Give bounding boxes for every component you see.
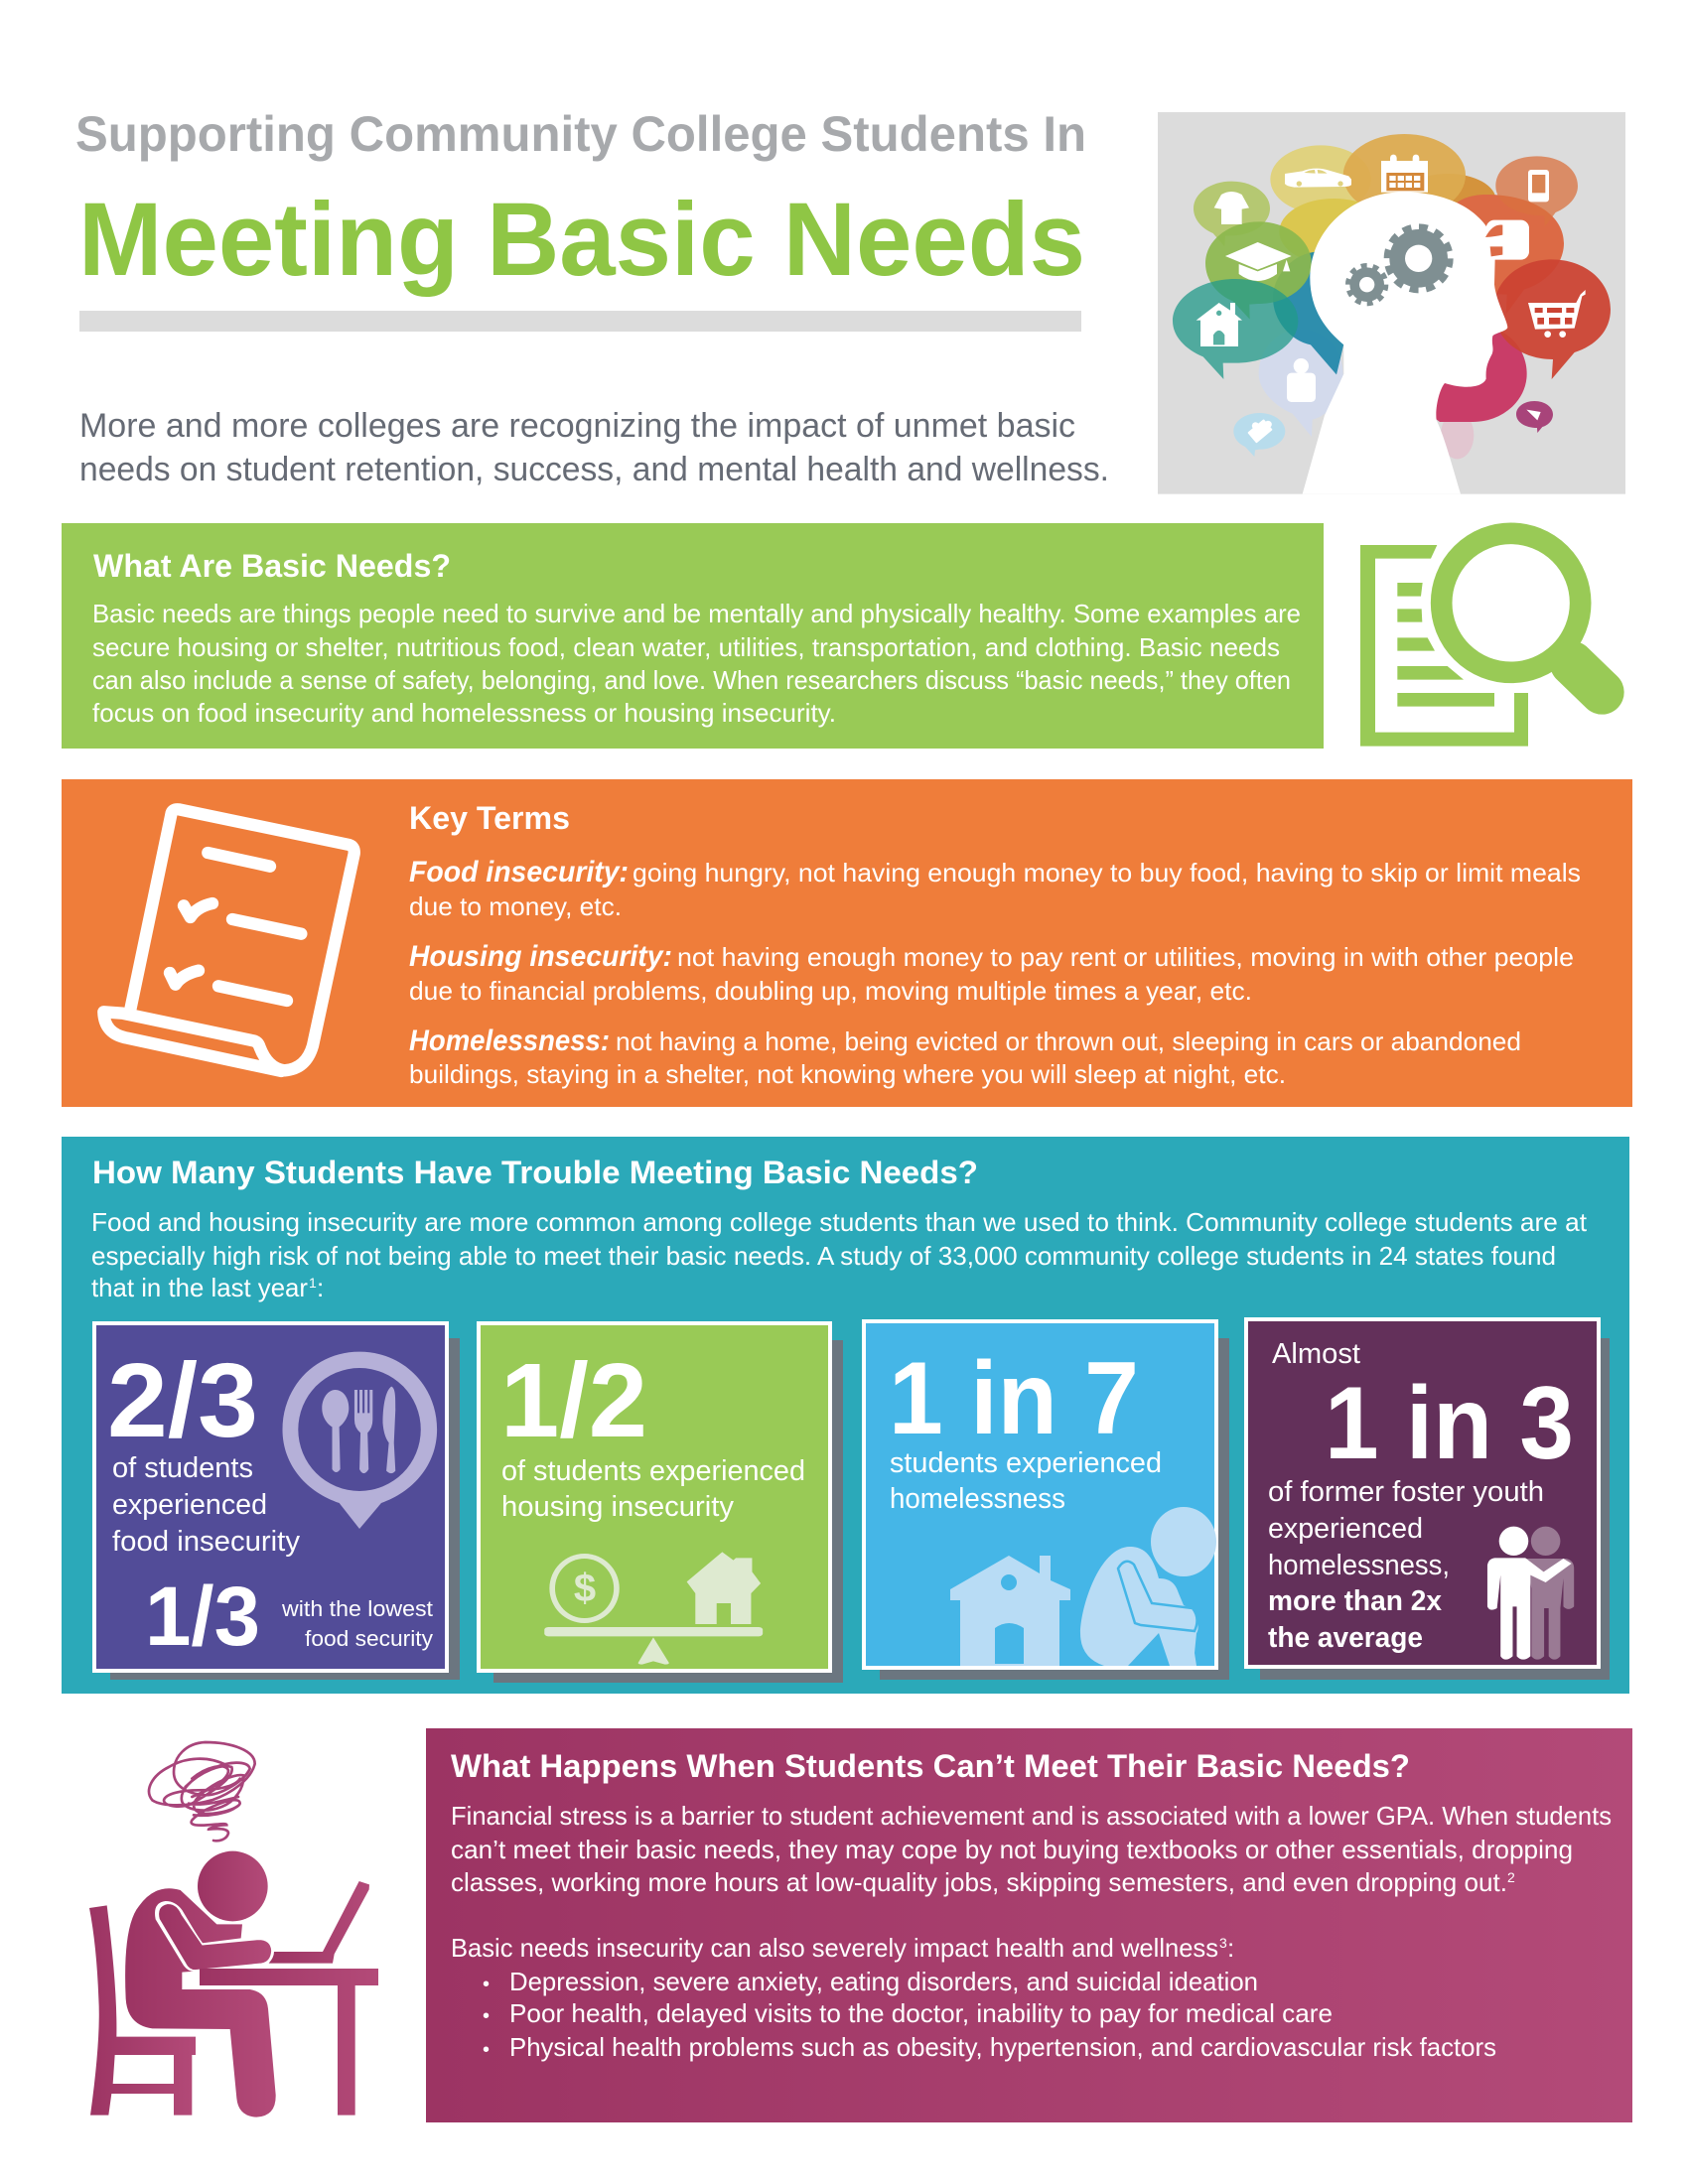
bullet list: • (483, 2005, 490, 2027)
heading: How Many Students Have Trouble Meeting Basic Needs? (92, 1155, 978, 1190)
term: food insecurity: going hungry, not having enough money to buy food, having to skip or limit meals (633, 858, 1581, 887)
bullet list: Poor health, delayed visits to the doctor, inability to pay for medical care (509, 1998, 1333, 2028)
bullet list: Physical health problems such as obesity, hypertension, and cardiovascular risk factors (509, 2032, 1496, 2062)
stat description: more than 2x (1268, 1585, 1442, 1617)
panel: what happens (426, 1728, 1632, 2122)
heading: Key Terms (409, 800, 570, 836)
stat description: of former foster youth (1268, 1476, 1544, 1508)
stat description: homelessness, (1268, 1550, 1450, 1581)
stat 1/3 description: food security (305, 1626, 434, 1651)
term: homelessness: Homelessness: (409, 1024, 610, 1057)
panel: key terms (62, 779, 1632, 1107)
term: housing insecurity: Housing insecurity: (409, 940, 672, 973)
icon: car (1285, 169, 1351, 188)
body text: especially high risk of not being able to meet their basic needs. A study of 33,000 community college students in 24 states found (91, 1241, 1556, 1271)
stat description: experienced (1268, 1513, 1423, 1545)
icon: small tag (1526, 410, 1541, 420)
body text: can also include a sense of safety, belonging, and love. When researchers discuss “basic needs,” they often (92, 665, 1291, 695)
body text: 3 (1219, 1935, 1227, 1951)
icon: gears (1347, 226, 1451, 304)
term: housing insecurity: due to financial problems, doubling up, moving multiple times a year, etc. (409, 976, 1252, 1006)
bullet list (483, 1967, 1496, 2062)
icon: checklist document (103, 809, 354, 1071)
body text: : (317, 1273, 324, 1302)
icon: house and person sitting (950, 1507, 1216, 1666)
body text: can’t meet their basic needs, they may cope by not buying textbooks or other essentials, dropping (451, 1835, 1573, 1864)
stat description: experienced (112, 1489, 267, 1521)
stat 1 in 7: 1 in 7 (889, 1341, 1139, 1456)
icon: books (1485, 220, 1529, 260)
icon: puzzle piece (1245, 414, 1275, 444)
term: food insecurity (409, 856, 1581, 921)
body text: that in the last year (91, 1273, 308, 1302)
term: housing insecurity: not having enough money to pay rent or utilities, moving in with other people (677, 942, 1574, 972)
body text: Basic needs are things people need to survive and be mentally and physically healthy. Some examples are (92, 599, 1301, 628)
panel: what are basic needs (62, 523, 1324, 749)
body text (92, 599, 1301, 728)
heading: What Happens When Students Can’t Meet Their Basic Needs? (451, 1748, 1410, 1784)
stat description (1268, 1476, 1544, 1654)
icon: plate with cutlery (282, 1352, 437, 1529)
title underline bar (79, 311, 1081, 332)
stat 1/3: 1/3 (145, 1570, 260, 1663)
stat card: food insecurity (94, 1323, 460, 1680)
title: main: Meeting Basic Needs (78, 182, 1085, 298)
body text: focus on food insecurity and homelessness or housing insecurity. (92, 698, 836, 728)
body text: classes, working more hours at low-quality jobs, skipping semesters, and even dropping out. (451, 1867, 1507, 1897)
scribble (149, 1742, 255, 1841)
label: almost: Almost (1272, 1338, 1360, 1370)
body text: Financial stress is a barrier to student achievement and is associated with a lower GPA. When students (451, 1801, 1612, 1831)
stat description: food insecurity (112, 1526, 300, 1558)
icon: phone (1528, 170, 1549, 202)
icon: shopping cart (1528, 290, 1586, 338)
bullet list: Depression, severe anxiety, eating disorders, and suicidal ideation (509, 1967, 1258, 1996)
stat description: students experienced (890, 1447, 1162, 1479)
term: housing insecurity (409, 940, 1574, 1006)
stat 2/3: 2/3 (107, 1342, 258, 1459)
heading: What Are Basic Needs? (93, 548, 451, 584)
body text: Basic needs insecurity can also severely impact health and wellness (451, 1933, 1218, 1963)
stat card: homelessness (864, 1321, 1229, 1680)
stat 1/3 description (281, 1596, 434, 1651)
term: food insecurity: due to money, etc. (409, 891, 622, 921)
body text: Food and housing insecurity are more common among college students than we used to think. Community college students are at (91, 1207, 1588, 1237)
term: food insecurity: Food insecurity: (409, 856, 629, 888)
stat description (501, 1455, 805, 1523)
stat 1/3 description: with the lowest (281, 1596, 434, 1621)
stat description: of students (112, 1452, 253, 1484)
icon: stressed student at laptop (89, 1742, 378, 2117)
body text: secure housing or shelter, nutritious food, clean water, utilities, transportation, and clothing. Basic needs (92, 632, 1280, 662)
bullet list: • (483, 1974, 490, 1995)
stat description: housing insecurity (501, 1491, 734, 1523)
stat description: homelessness (890, 1483, 1065, 1515)
body text (91, 1207, 1588, 1302)
title: eyebrow: Supporting Community College Students In (75, 106, 1086, 162)
term: homelessness: not having a home, being evicted or thrown out, sleeping in cars or abandoned (616, 1026, 1521, 1056)
stat 1 in 3: 1 in 3 (1325, 1366, 1574, 1481)
bullet list: • (483, 2039, 490, 2061)
icon: shirt (1214, 192, 1249, 224)
icon: house (1196, 303, 1242, 346)
body text: 1 (309, 1275, 317, 1291)
icon: calendar (1381, 155, 1428, 193)
stat card: former foster youth (1246, 1319, 1610, 1680)
panel: how many students (62, 1137, 1629, 1694)
term: homelessness (409, 1024, 1521, 1089)
body text: : (1227, 1933, 1234, 1963)
illustration: head with speech bubbles (1158, 112, 1625, 494)
icon: magnifying glass over document (1360, 533, 1602, 747)
icon: person with tie (1287, 358, 1316, 402)
stat 1/2: 1/2 (500, 1342, 647, 1459)
icon: balance with coin and house (544, 1552, 763, 1665)
term: homelessness: buildings, staying in a shelter, not knowing where you will sleep at night, etc. (409, 1059, 1286, 1089)
stat description (112, 1452, 300, 1558)
stat description (890, 1447, 1162, 1515)
body text (451, 1801, 1612, 1963)
stat card: housing insecurity (479, 1323, 843, 1683)
intro text: More and more colleges are recognizing the impact of unmet basic (79, 407, 1075, 445)
stat description: the average (1268, 1622, 1423, 1654)
stat description: of students experienced (501, 1455, 805, 1487)
intro text (79, 407, 1109, 488)
icon: balance with coin and house: $ (574, 1567, 596, 1610)
intro text: needs on student retention, success, and mental health and wellness. (79, 451, 1109, 488)
body text: 2 (1507, 1869, 1515, 1885)
icon: graduation cap (1225, 242, 1292, 281)
icon: two people (1487, 1527, 1574, 1660)
head silhouette (1303, 192, 1507, 494)
